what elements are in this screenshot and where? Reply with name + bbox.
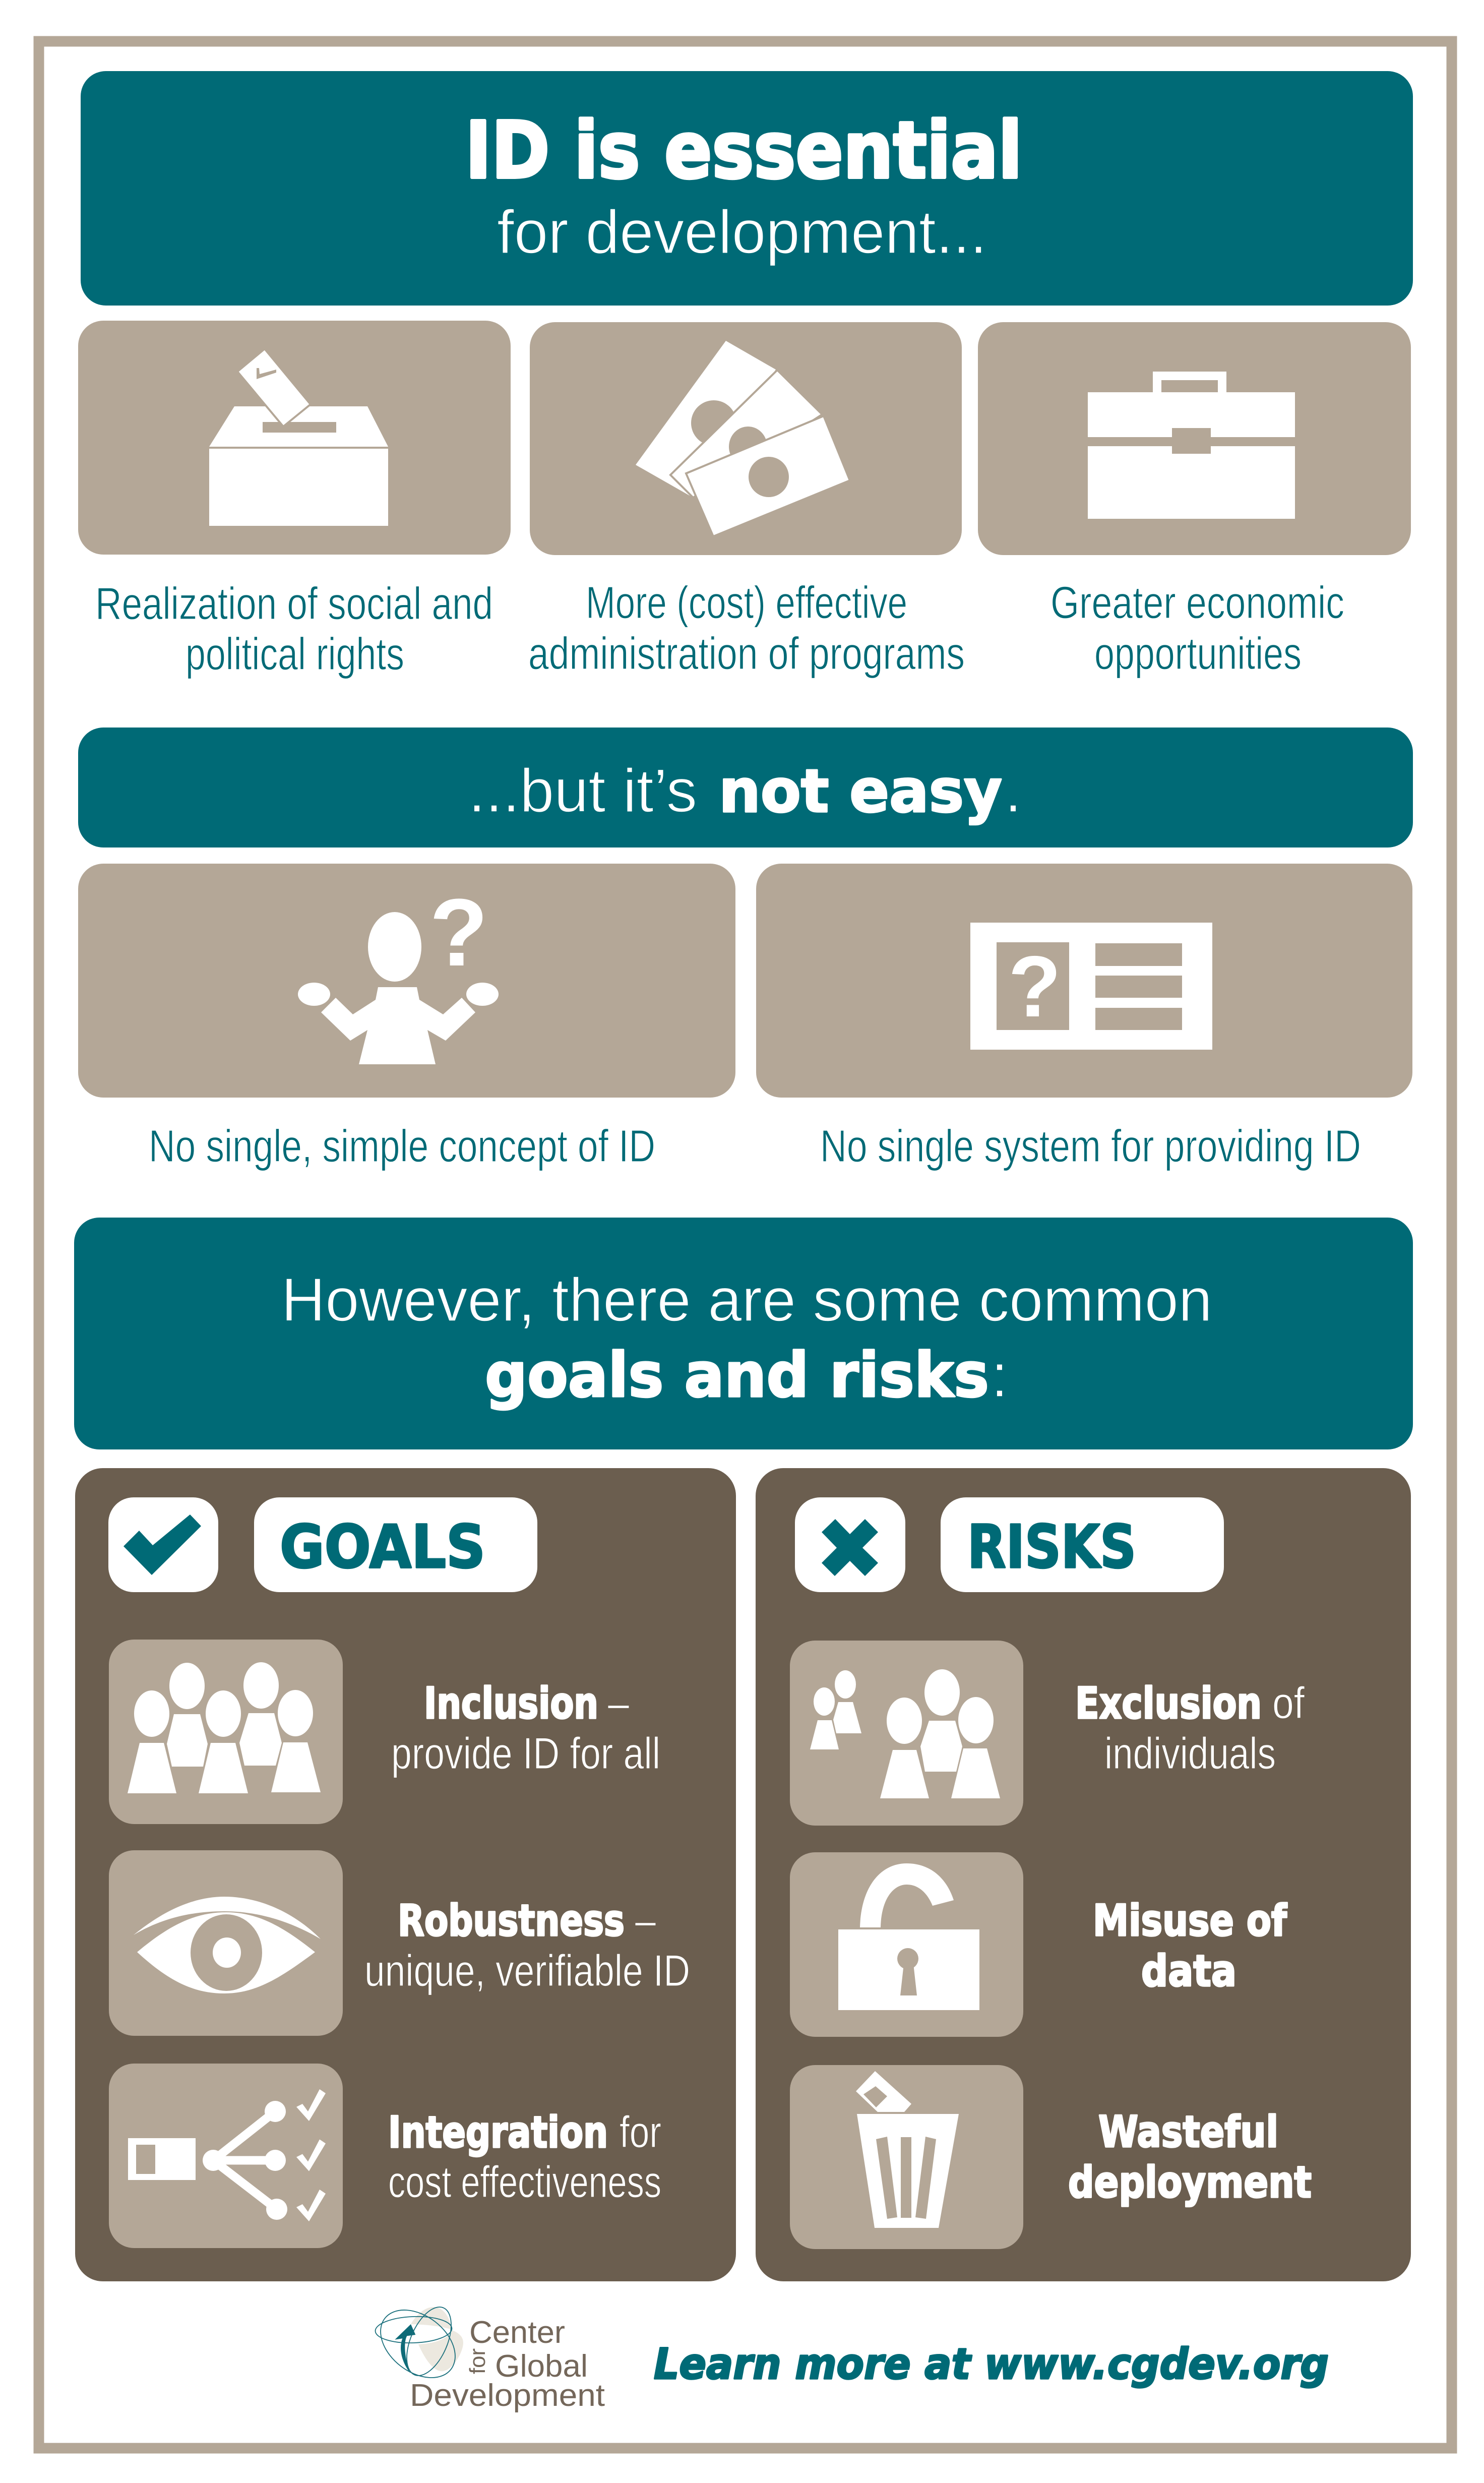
logo: Center for Global Development	[367, 2296, 605, 2413]
text: integration: for	[620, 2107, 661, 2157]
heading: goals	[254, 1497, 537, 1592]
logo wordmark: Development	[410, 2378, 605, 2413]
caption	[1050, 578, 1344, 679]
caption: No single system for providing ID	[820, 1121, 1361, 1172]
header: but it's not easy: not easy	[719, 756, 1002, 826]
caption: Realization of social and	[95, 579, 493, 629]
text: inclusion	[391, 1678, 660, 1778]
text: robustness: Robustness	[398, 1896, 625, 1946]
text: wasteful: Wasteful	[1098, 2107, 1278, 2157]
heading: risks: RISKS	[967, 1512, 1136, 1582]
header: goals and risks	[74, 1218, 1413, 1449]
header: but it's not easy: .	[1005, 756, 1022, 825]
text: inclusion: Inclusion	[424, 1678, 598, 1729]
heading: goals: GOALS	[280, 1512, 485, 1582]
caption: political rights	[186, 629, 404, 680]
text: integration: cost effectiveness	[388, 2157, 661, 2207]
header: goals and risks: However, there are some common	[281, 1265, 1212, 1334]
text: robustness	[364, 1895, 690, 1995]
panel: no single system	[756, 864, 1412, 1172]
header: but it's not easy: ...but it’s	[468, 756, 697, 825]
icon: open padlock	[790, 1852, 1023, 2037]
icon: group of people	[109, 1640, 343, 1824]
caption: opportunities	[1094, 629, 1302, 679]
icon: ID card with question mark	[970, 923, 1212, 1050]
header: ID is essential	[81, 71, 1413, 306]
logo mark	[395, 2307, 463, 2373]
text: inclusion: –	[608, 1678, 629, 1728]
subtitle: for development...	[497, 198, 987, 266]
icon: X mark	[795, 1497, 905, 1592]
panel: risks	[756, 1468, 1411, 2281]
text: misuse: data	[1141, 1946, 1236, 1996]
caption	[95, 579, 493, 680]
panel: goals	[75, 1468, 736, 2281]
icon: check mark	[108, 1497, 218, 1592]
caption: Greater economic	[1050, 578, 1344, 628]
call to action: website: Learn more at www.cgdev.org	[654, 2339, 1329, 2389]
icon: eye	[109, 1850, 343, 2036]
icon: briefcase	[1088, 372, 1295, 519]
text: integration: Integration	[388, 2107, 608, 2158]
heading: risks	[941, 1497, 1224, 1592]
text: inclusion: provide ID for all	[391, 1728, 660, 1778]
text: robustness: unique, verifiable ID	[364, 1946, 690, 1995]
icon: integrated systems	[109, 2064, 343, 2248]
icon: ID card with question mark: ?	[1008, 938, 1061, 1035]
logo wordmark: Global	[495, 2349, 588, 2384]
text: integration	[388, 2107, 661, 2207]
text: misuse	[1093, 1896, 1287, 1996]
text: exclusion: of	[1272, 1678, 1305, 1728]
text: wasteful	[1068, 2107, 1312, 2208]
title: ID is essential	[465, 105, 1022, 196]
panel: economic opportunities	[978, 322, 1411, 679]
header: but it's not easy	[78, 728, 1413, 847]
text: exclusion	[1075, 1678, 1305, 1778]
header: goals and risks: :	[991, 1341, 1008, 1410]
icon: trash can	[790, 2065, 1023, 2249]
logo wordmark: for	[465, 2348, 490, 2374]
caption: No single, simple concept of ID	[149, 1121, 655, 1172]
icon: money bills	[636, 341, 850, 536]
logo wordmark: Center	[469, 2315, 565, 2350]
text: wasteful: deployment	[1068, 2157, 1312, 2208]
panel: cost effective administration	[528, 322, 965, 679]
text: robustness: –	[635, 1895, 656, 1945]
caption: More (cost) effective	[586, 578, 907, 628]
icon: shrugging person with question mark: ?	[429, 879, 488, 986]
panel: social and political rights	[78, 321, 511, 680]
text: exclusion: individuals	[1104, 1728, 1276, 1778]
icon: shrugging person with question mark	[298, 879, 499, 1064]
panel: no single concept of ID	[78, 864, 735, 1172]
icon: excluded individuals	[790, 1641, 1023, 1826]
text: misuse: Misuse of	[1093, 1896, 1287, 1946]
text: exclusion: Exclusion	[1075, 1678, 1262, 1729]
caption	[528, 578, 965, 679]
logo wordmark	[410, 2315, 605, 2413]
caption: administration of programs	[528, 629, 965, 679]
icon: ballot box	[209, 349, 388, 526]
header: goals and risks: goals and risks	[485, 1340, 989, 1411]
